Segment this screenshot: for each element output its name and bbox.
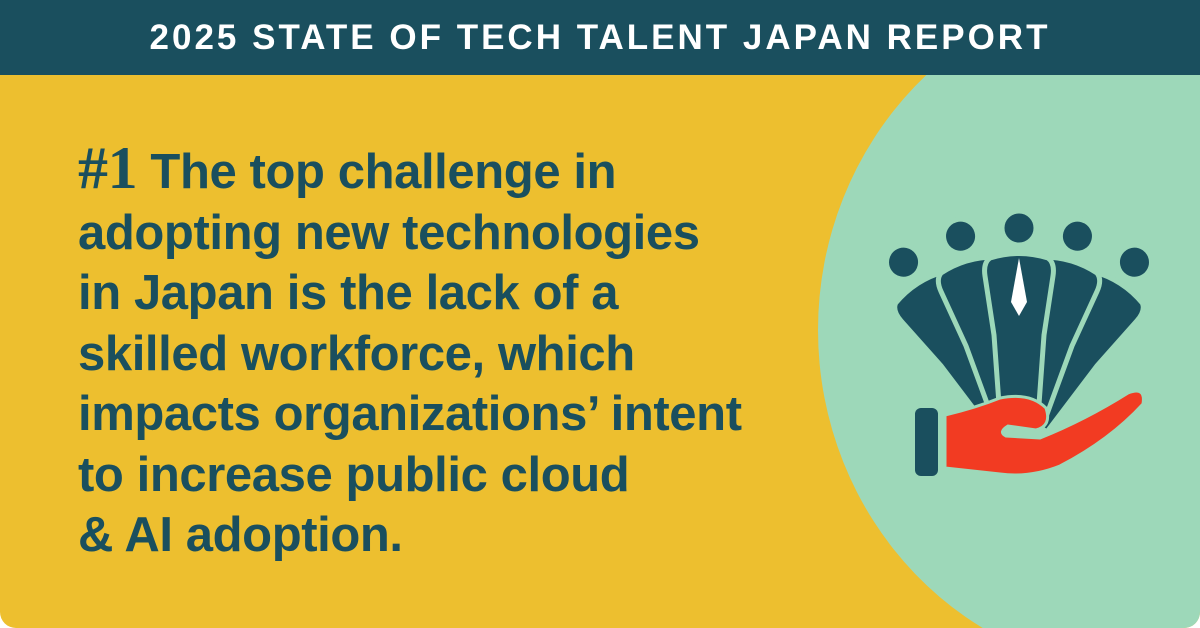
- main statement: #1 The top challenge in adopting new technologies in Japan is the lack of a skilled workforce, which impacts organizations’ intent to increase public cloud & AI adoption.: [78, 135, 742, 562]
- cuff: [915, 408, 938, 476]
- tie: [1011, 258, 1027, 316]
- header: [0, 0, 1200, 75]
- hand: [945, 391, 1143, 475]
- green circle: [818, 0, 1200, 628]
- icon: team held in hand: [865, 210, 1173, 476]
- header: 2025 STATE OF TECH TALENT JAPAN REPORT: [150, 18, 1050, 57]
